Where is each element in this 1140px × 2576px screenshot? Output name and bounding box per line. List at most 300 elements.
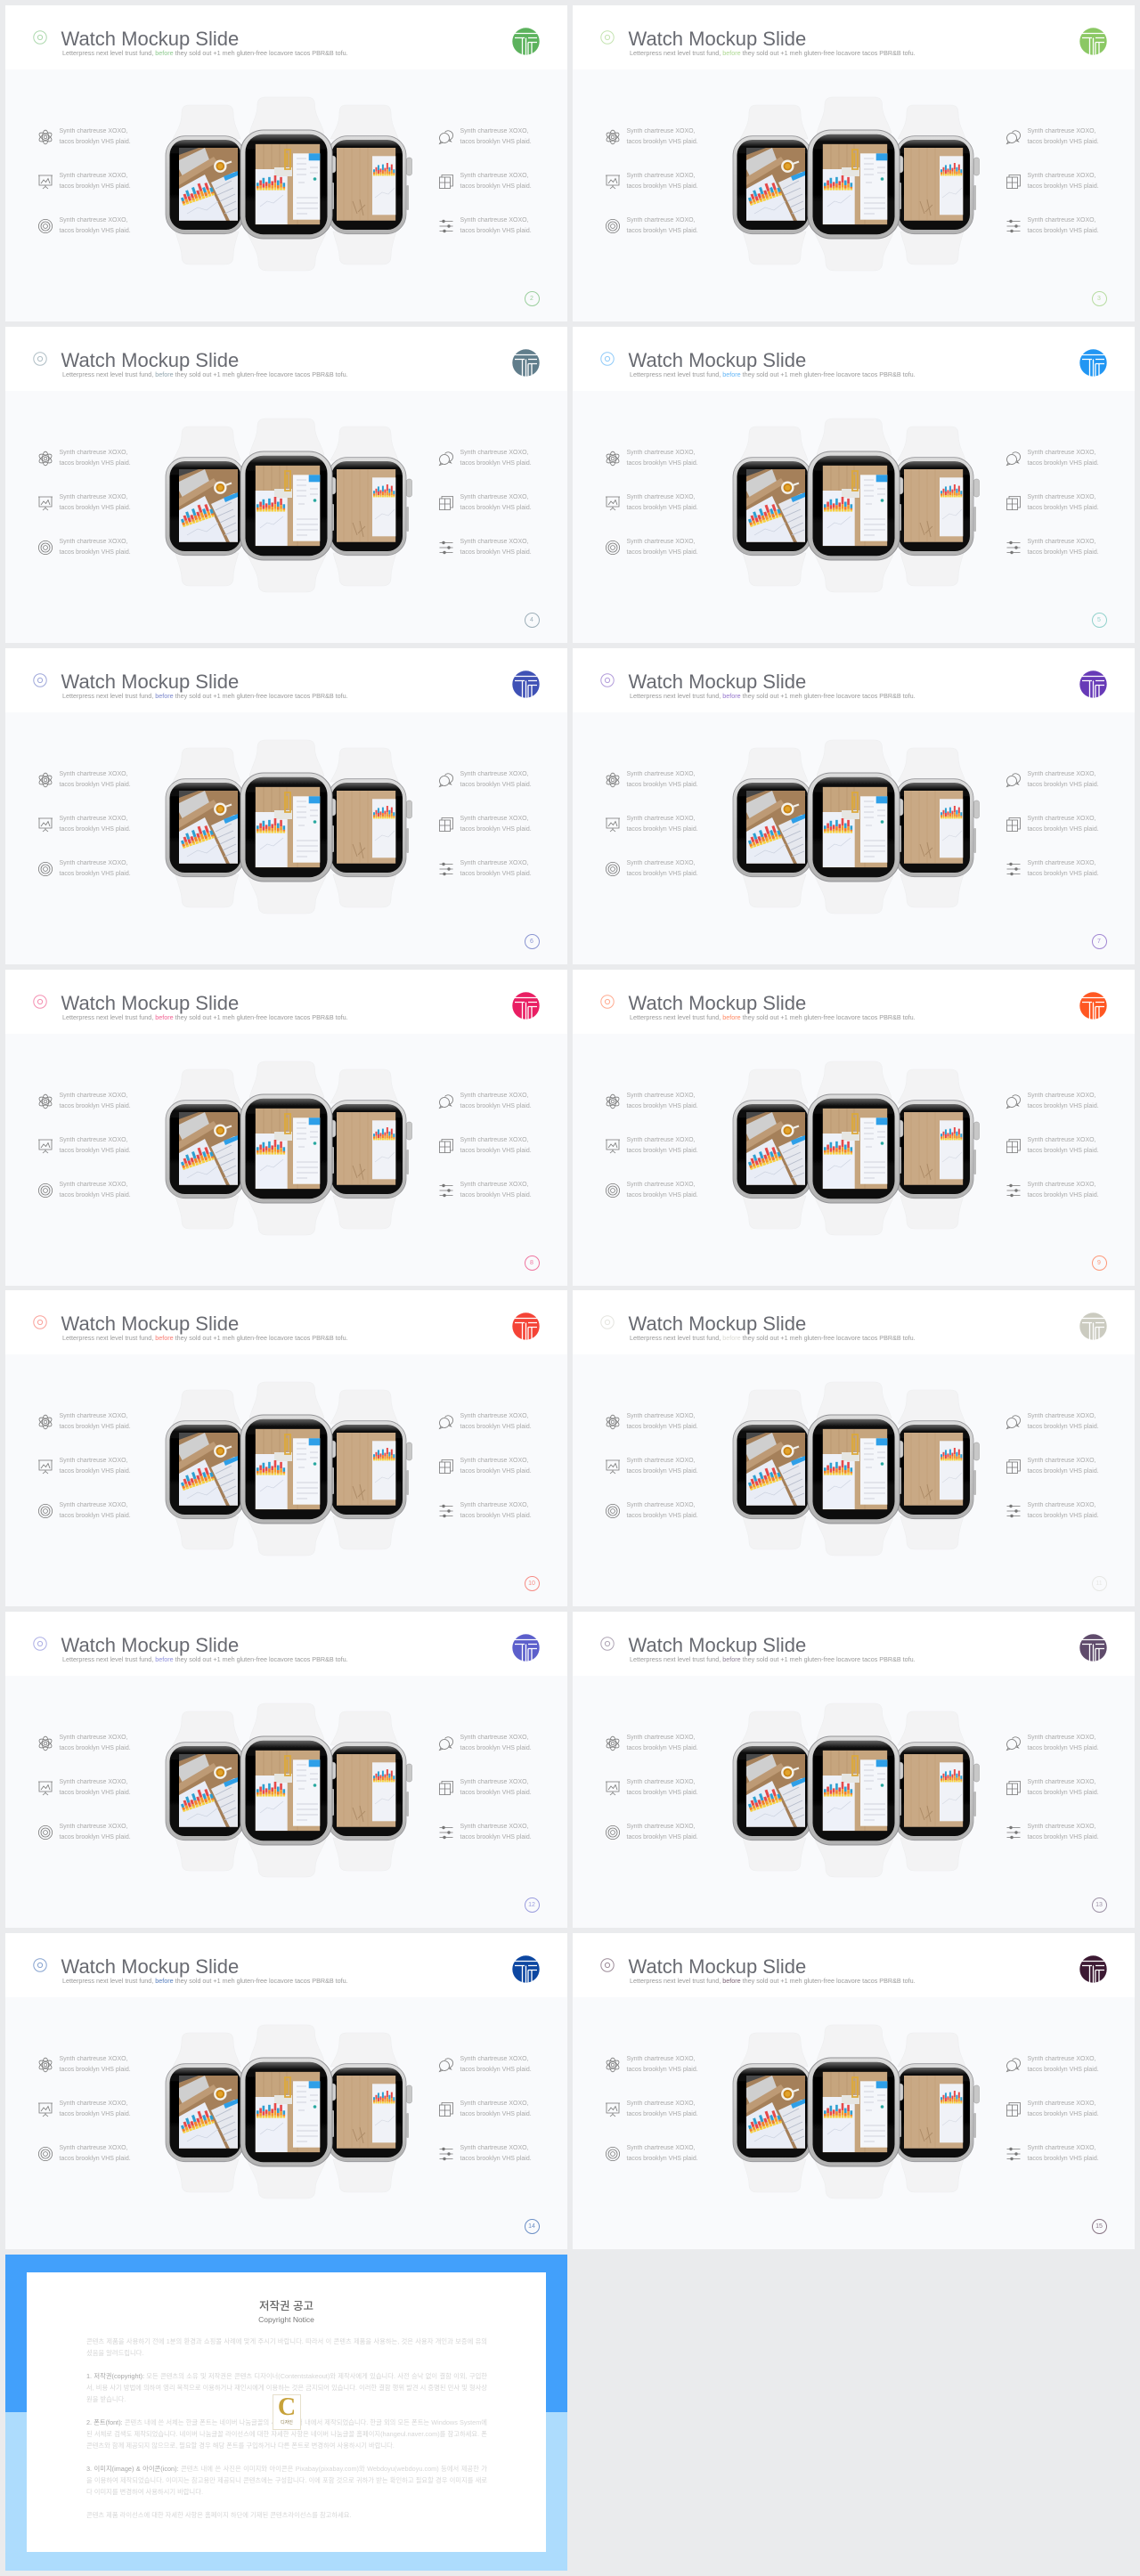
feature: layers — [1005, 1456, 1104, 1478]
feature: atom: tacos brooklyn VHS plaid. — [627, 1424, 698, 1430]
title: Watch Mockup Slide — [61, 992, 239, 1014]
feature: atom: tacos brooklyn VHS plaid. — [59, 1745, 131, 1751]
feature: sliders — [436, 858, 536, 881]
feature: presentation: Synth chartreuse XOXO, — [59, 494, 128, 500]
feature: presentation — [38, 494, 131, 511]
feature: layers: Synth chartreuse XOXO, — [1028, 816, 1096, 822]
feature: layers: Synth chartreuse XOXO, — [460, 1137, 529, 1143]
slide panel 14 — [5, 1933, 567, 2249]
icon: header ring — [33, 352, 47, 366]
subtitle: Letterpress next level trust fund, before they sold out +1 meh gluten-free locavore tacos PBR&B tofu. — [62, 1977, 348, 1985]
title: Watch Mockup Slide — [61, 1312, 239, 1335]
icon: brand logo — [512, 1312, 540, 1340]
page number — [524, 934, 540, 949]
feature: sliders: tacos brooklyn VHS plaid. — [1028, 2156, 1099, 2162]
feature: layers: Synth chartreuse XOXO, — [1028, 1137, 1096, 1143]
header band — [5, 1933, 567, 1997]
page number — [524, 2219, 540, 2234]
page number: 3 — [1097, 296, 1101, 302]
feature: presentation — [36, 814, 135, 836]
feature: target: Synth chartreuse XOXO, — [59, 860, 128, 866]
feature: sliders: Synth chartreuse XOXO, — [460, 539, 529, 545]
header band — [573, 1933, 1135, 1997]
feature: target — [36, 1822, 135, 1844]
watch trio mockup — [5, 1612, 567, 1928]
feature: atom — [606, 449, 698, 467]
feature: sliders: tacos brooklyn VHS plaid. — [1028, 549, 1099, 556]
feature: target — [604, 1180, 704, 1202]
feature: layers — [1005, 1777, 1104, 1800]
feature: sliders — [1006, 539, 1099, 556]
feature: atom: tacos brooklyn VHS plaid. — [59, 2067, 131, 2073]
feature: chat — [1005, 769, 1104, 791]
icon: brand logo — [1079, 349, 1107, 377]
feature: sliders: tacos brooklyn VHS plaid. — [1028, 871, 1099, 877]
feature: atom — [604, 2053, 704, 2076]
icon: brand logo — [1079, 1634, 1107, 1662]
feature: sliders: tacos brooklyn VHS plaid. — [460, 2156, 532, 2162]
feature: sliders: tacos brooklyn VHS plaid. — [1028, 1192, 1099, 1199]
subtitle: Letterpress next level trust fund, before they sold out +1 meh gluten-free locavore tacos PBR&B tofu. — [630, 370, 916, 378]
subtitle: Letterpress next level trust fund, before they sold out +1 meh gluten-free locavore tacos PBR&B tofu. — [630, 1334, 916, 1342]
feature: chat: tacos brooklyn VHS plaid. — [460, 2067, 532, 2073]
text block: font — [27, 2417, 546, 2451]
icon: header ring — [33, 995, 47, 1009]
feature: target — [604, 1500, 704, 1523]
feature: chat — [1005, 1410, 1104, 1434]
feature: atom: Synth chartreuse XOXO, — [627, 1412, 696, 1419]
feature: layers — [439, 494, 532, 511]
feature: layers: tacos brooklyn VHS plaid. — [1028, 1148, 1099, 1154]
page number: 14 — [528, 2223, 535, 2230]
feature: layers — [439, 173, 532, 190]
feature: target — [36, 2143, 135, 2166]
subtitle: Letterpress next level trust fund, before they sold out +1 meh gluten-free locavore tacos PBR&B tofu. — [62, 1013, 348, 1021]
feature: atom: Synth chartreuse XOXO, — [627, 2055, 696, 2062]
subtitle: Letterpress next level trust fund, before they sold out +1 meh gluten-free locavore tacos PBR&B tofu. — [630, 1977, 916, 1985]
icon: brand logo — [1079, 28, 1107, 55]
feature: target: tacos brooklyn VHS plaid. — [627, 549, 698, 556]
feature: sliders — [1005, 1822, 1104, 1844]
feature: presentation: Synth chartreuse XOXO, — [627, 494, 696, 500]
page number — [524, 613, 540, 628]
watch trio mockup — [166, 97, 412, 271]
feature: layers: tacos brooklyn VHS plaid. — [460, 2111, 532, 2117]
feature: atom: Synth chartreuse XOXO, — [59, 1412, 128, 1419]
feature: layers: tacos brooklyn VHS plaid. — [1028, 826, 1099, 833]
title: Watch Mockup Slide — [629, 1312, 806, 1335]
page number: 2 — [530, 296, 533, 302]
title: Watch Mockup Slide — [629, 1634, 806, 1656]
feature: presentation: Synth chartreuse XOXO, — [627, 2101, 696, 2107]
feature: sliders — [440, 217, 532, 234]
feature: presentation — [606, 494, 698, 511]
icon: header ring — [33, 673, 47, 687]
feature: sliders: Synth chartreuse XOXO, — [1028, 1502, 1096, 1508]
slide panel 8 — [5, 970, 567, 1286]
subtitle: Letterpress next level trust fund, before they sold out +1 meh gluten-free locavore tacos PBR&B tofu. — [62, 49, 348, 57]
feature: layers — [1006, 173, 1099, 190]
slide panel 7 — [573, 648, 1135, 964]
subtitle: Letterpress next level trust fund, before they sold out +1 meh gluten-free locavore tacos PBR&B tofu. — [62, 1334, 348, 1342]
feature: target: tacos brooklyn VHS plaid. — [627, 1192, 698, 1199]
feature: atom — [604, 769, 704, 791]
feature: sliders: Synth chartreuse XOXO, — [460, 1824, 529, 1830]
feature: target — [36, 1500, 135, 1523]
stamp logo — [273, 2394, 301, 2430]
feature: atom — [39, 449, 131, 467]
icon: header ring — [33, 1637, 47, 1651]
feature: atom: tacos brooklyn VHS plaid. — [627, 139, 698, 145]
subtitle: Letterpress next level trust fund, before they sold out +1 meh gluten-free locavore tacos PBR&B tofu. — [630, 1013, 916, 1021]
title: Watch Mockup Slide — [61, 1955, 239, 1978]
feature: atom: tacos brooklyn VHS plaid. — [627, 1745, 698, 1751]
page number: 10 — [528, 1581, 535, 1587]
page number — [524, 291, 540, 306]
feature: atom — [36, 2053, 135, 2076]
feature: presentation: Synth chartreuse XOXO, — [59, 173, 128, 179]
feature: chat — [1005, 2053, 1104, 2076]
feature: chat — [1006, 128, 1099, 145]
watch trio mockup — [5, 970, 567, 1286]
header band — [573, 1612, 1135, 1676]
feature: sliders: Synth chartreuse XOXO, — [460, 1182, 529, 1188]
feature: sliders: Synth chartreuse XOXO, — [460, 1502, 529, 1508]
heading: English subtitle: Copyright Notice — [258, 2315, 314, 2324]
slide panel 6 — [5, 648, 567, 964]
feature: sliders: Synth chartreuse XOXO, — [1028, 539, 1096, 545]
feature: sliders — [436, 2143, 536, 2166]
feature: presentation: Synth chartreuse XOXO, — [627, 1137, 696, 1143]
feature: presentation: tacos brooklyn VHS plaid. — [59, 826, 131, 833]
feature: presentation — [604, 2099, 704, 2121]
feature: layers — [436, 1777, 536, 1800]
slide panel 5 — [573, 327, 1135, 643]
feature: sliders — [1006, 217, 1099, 234]
feature: target: tacos brooklyn VHS plaid. — [627, 871, 698, 877]
watch trio mockup — [573, 1612, 1135, 1928]
feature: chat: Synth chartreuse XOXO, — [460, 1735, 529, 1740]
feature: chat — [438, 128, 532, 145]
feature: chat: Synth chartreuse XOXO, — [1028, 1412, 1096, 1419]
feature: atom: Synth chartreuse XOXO, — [627, 771, 696, 776]
feature: layers — [1005, 814, 1104, 836]
feature: sliders: tacos brooklyn VHS plaid. — [1028, 1513, 1099, 1519]
feature: target: Synth chartreuse XOXO, — [59, 539, 128, 545]
feature: target — [606, 539, 698, 556]
feature: atom: tacos brooklyn VHS plaid. — [59, 1103, 131, 1109]
feature: layers: Synth chartreuse XOXO, — [460, 173, 529, 179]
watch trio mockup — [573, 1290, 1135, 1606]
feature: target: Synth chartreuse XOXO, — [59, 1502, 128, 1508]
feature: chat — [436, 769, 536, 791]
feature: chat: tacos brooklyn VHS plaid. — [1028, 1103, 1099, 1109]
icon: brand logo — [1079, 1312, 1107, 1340]
feature: chat: tacos brooklyn VHS plaid. — [460, 1745, 532, 1751]
icon: brand logo — [1079, 670, 1107, 698]
feature: sliders — [1005, 1180, 1104, 1202]
page number — [1092, 2219, 1106, 2234]
feature: target: tacos brooklyn VHS plaid. — [627, 2156, 698, 2162]
feature: sliders: Synth chartreuse XOXO, — [1028, 217, 1096, 223]
slide panel 3 — [573, 5, 1135, 321]
feature: target: Synth chartreuse XOXO, — [627, 860, 696, 866]
feature: atom: Synth chartreuse XOXO, — [59, 128, 128, 134]
feature: target: tacos brooklyn VHS plaid. — [59, 549, 131, 556]
feature: sliders: tacos brooklyn VHS plaid. — [1028, 228, 1099, 234]
feature: target: tacos brooklyn VHS plaid. — [59, 2156, 131, 2162]
text block: image and icon: 다 이미지를 변경하여 사용하시기 바랍니다. — [86, 2488, 203, 2496]
feature: target: tacos brooklyn VHS plaid. — [59, 1513, 131, 1519]
feature: target: Synth chartreuse XOXO, — [627, 1502, 696, 1508]
page number: 5 — [1097, 617, 1101, 623]
feature: presentation: Synth chartreuse XOXO, — [59, 1137, 128, 1143]
page number: 8 — [530, 1260, 533, 1266]
icon: brand logo — [512, 670, 540, 698]
icon: brand logo — [512, 992, 540, 1020]
text block: copyright: 1. 저작권(copyright): 모든 콘텐츠의 소유 및 저작권은 콘텐츠 디자이너(Contentstakeout)와 제작사에게 있습니다. 사전 승낙 없이 결함 이외, 구입한 — [86, 2372, 487, 2380]
feature: sliders: Synth chartreuse XOXO, — [1028, 1182, 1096, 1188]
feature: target: tacos brooklyn VHS plaid. — [59, 1192, 131, 1199]
feature: layers — [436, 814, 536, 836]
header band — [573, 970, 1135, 1034]
feature: layers: tacos brooklyn VHS plaid. — [1028, 505, 1099, 511]
watch trio mockup — [5, 1290, 567, 1606]
title: Watch Mockup Slide — [629, 992, 806, 1014]
feature: presentation: tacos brooklyn VHS plaid. — [627, 1790, 698, 1796]
subtitle: Letterpress next level trust fund, before they sold out +1 meh gluten-free locavore tacos PBR&B tofu. — [630, 692, 916, 700]
feature: chat: Synth chartreuse XOXO, — [1028, 449, 1096, 456]
feature: layers: tacos brooklyn VHS plaid. — [460, 1148, 532, 1154]
header band — [5, 1612, 567, 1676]
feature: sliders: Synth chartreuse XOXO, — [460, 217, 529, 223]
page number: 13 — [1095, 1902, 1103, 1908]
feature: layers — [1006, 494, 1099, 511]
feature: sliders: tacos brooklyn VHS plaid. — [460, 228, 532, 234]
feature: presentation: tacos brooklyn VHS plaid. — [627, 183, 698, 190]
feature: layers: tacos brooklyn VHS plaid. — [460, 183, 532, 190]
feature: chat: Synth chartreuse XOXO, — [460, 771, 529, 776]
feature: chat — [1005, 1090, 1104, 1113]
feature: layers: tacos brooklyn VHS plaid. — [1028, 1790, 1099, 1796]
feature: chat: tacos brooklyn VHS plaid. — [1028, 460, 1099, 467]
feature: target: tacos brooklyn VHS plaid. — [627, 1834, 698, 1841]
feature: presentation: tacos brooklyn VHS plaid. — [627, 1468, 698, 1475]
title: Watch Mockup Slide — [61, 349, 239, 371]
watch trio mockup — [732, 418, 980, 592]
text block: image and icon — [27, 2463, 546, 2498]
icon: header ring — [600, 1958, 615, 1972]
title: Watch Mockup Slide — [629, 670, 806, 693]
subtitle: Letterpress next level trust fund, before they sold out +1 meh gluten-free locavore tacos PBR&B tofu. — [62, 370, 348, 378]
feature: presentation: tacos brooklyn VHS plaid. — [627, 505, 698, 511]
feature: presentation: Synth chartreuse XOXO, — [627, 816, 696, 822]
feature: target — [604, 858, 704, 881]
feature: target: tacos brooklyn VHS plaid. — [59, 228, 131, 234]
feature: chat: Synth chartreuse XOXO, — [1028, 2055, 1096, 2062]
feature: chat: Synth chartreuse XOXO, — [460, 1092, 529, 1099]
feature: atom — [36, 1090, 135, 1113]
icon: header ring — [33, 1315, 47, 1329]
feature: atom: tacos brooklyn VHS plaid. — [59, 139, 131, 145]
feature: target — [604, 2143, 704, 2166]
feature: chat: Synth chartreuse XOXO, — [460, 128, 529, 134]
feature: presentation — [604, 814, 704, 836]
icon: header ring — [600, 352, 615, 366]
feature: chat: tacos brooklyn VHS plaid. — [460, 1424, 532, 1430]
header band — [5, 1290, 567, 1354]
feature: layers — [436, 1456, 536, 1478]
icon: brand logo — [512, 1955, 540, 1983]
feature: atom: Synth chartreuse XOXO, — [627, 1735, 696, 1740]
feature: atom: tacos brooklyn VHS plaid. — [59, 460, 131, 467]
slide panel 4 — [5, 327, 567, 643]
feature: chat — [438, 449, 532, 467]
subtitle: Letterpress next level trust fund, before they sold out +1 meh gluten-free locavore tacos PBR&B tofu. — [62, 1655, 348, 1663]
feature: target — [38, 539, 131, 556]
icon: header ring — [600, 1315, 615, 1329]
feature: sliders — [436, 1822, 536, 1844]
feature: target: tacos brooklyn VHS plaid. — [627, 228, 698, 234]
feature: target: Synth chartreuse XOXO, — [627, 539, 696, 545]
subtitle: Letterpress next level trust fund, before they sold out +1 meh gluten-free locavore tacos PBR&B tofu. — [62, 692, 348, 700]
page number — [1092, 1255, 1106, 1271]
icon: brand logo — [1079, 992, 1107, 1020]
feature: layers: Synth chartreuse XOXO, — [460, 1779, 529, 1785]
feature: presentation: tacos brooklyn VHS plaid. — [627, 826, 698, 833]
title: Watch Mockup Slide — [61, 1634, 239, 1656]
feature: layers: Synth chartreuse XOXO, — [1028, 1458, 1096, 1464]
feature: sliders — [1005, 858, 1104, 881]
feature: sliders: tacos brooklyn VHS plaid. — [460, 1192, 532, 1199]
feature: presentation — [604, 1456, 704, 1478]
feature: chat — [1005, 1733, 1104, 1754]
white notice card — [27, 2272, 546, 2552]
feature: presentation: tacos brooklyn VHS plaid. — [627, 2111, 698, 2117]
feature: chat: Synth chartreuse XOXO, — [460, 2055, 529, 2062]
feature: layers — [436, 1135, 536, 1158]
watch trio mockup — [573, 648, 1135, 964]
watch trio mockup — [5, 648, 567, 964]
feature: sliders — [436, 1180, 536, 1202]
icon: brand logo — [512, 28, 540, 55]
feature: target — [604, 1822, 704, 1844]
feature: atom: tacos brooklyn VHS plaid. — [59, 782, 131, 788]
feature: layers: tacos brooklyn VHS plaid. — [1028, 2111, 1099, 2117]
watch trio mockup — [166, 418, 412, 592]
page number: 9 — [1097, 1260, 1101, 1266]
feature: target: tacos brooklyn VHS plaid. — [59, 1834, 131, 1841]
feature: atom: Synth chartreuse XOXO, — [59, 1735, 128, 1740]
feature: sliders: tacos brooklyn VHS plaid. — [460, 1834, 532, 1841]
feature: atom — [606, 128, 698, 145]
feature: layers: Synth chartreuse XOXO, — [460, 494, 529, 500]
feature: presentation: tacos brooklyn VHS plaid. — [627, 1148, 698, 1154]
icon: brand logo — [512, 349, 540, 377]
feature: atom: Synth chartreuse XOXO, — [59, 1092, 128, 1099]
feature: presentation — [606, 173, 698, 190]
feature: chat: tacos brooklyn VHS plaid. — [460, 460, 532, 467]
page number — [1092, 934, 1106, 949]
icon: header ring — [600, 673, 615, 687]
icon: brand logo — [1079, 1955, 1107, 1983]
page number: 12 — [528, 1902, 535, 1908]
page number: 11 — [1095, 1581, 1103, 1587]
feature: layers — [1005, 1135, 1104, 1158]
feature: target: Synth chartreuse XOXO, — [59, 1824, 128, 1830]
feature: target — [36, 1180, 135, 1202]
feature: sliders — [436, 1500, 536, 1523]
feature: presentation — [604, 1135, 704, 1158]
feature: sliders: tacos brooklyn VHS plaid. — [460, 1513, 532, 1519]
feature: presentation: tacos brooklyn VHS plaid. — [59, 1468, 131, 1475]
page number: 15 — [1095, 2223, 1103, 2230]
feature: chat — [1006, 449, 1099, 467]
feature: target: tacos brooklyn VHS plaid. — [627, 1513, 698, 1519]
feature: chat: tacos brooklyn VHS plaid. — [460, 139, 532, 145]
feature: sliders: tacos brooklyn VHS plaid. — [460, 549, 532, 556]
icon: brand logo — [512, 1634, 540, 1662]
feature: layers: Synth chartreuse XOXO, — [1028, 173, 1096, 179]
feature: layers: tacos brooklyn VHS plaid. — [460, 1790, 532, 1796]
feature: sliders: tacos brooklyn VHS plaid. — [460, 871, 532, 877]
title: Watch Mockup Slide — [629, 1955, 806, 1978]
feature: layers — [1005, 2099, 1104, 2121]
feature: layers: Synth chartreuse XOXO, — [1028, 1779, 1096, 1785]
feature: layers: Synth chartreuse XOXO, — [460, 816, 529, 822]
page number — [1092, 1897, 1106, 1913]
feature: presentation — [36, 2099, 135, 2121]
feature: presentation: tacos brooklyn VHS plaid. — [59, 183, 131, 190]
text block: copyright: 원을 받습니다. — [86, 2395, 126, 2403]
feature: sliders: Synth chartreuse XOXO, — [1028, 860, 1096, 866]
feature: chat: tacos brooklyn VHS plaid. — [1028, 139, 1099, 145]
subtitle: Letterpress next level trust fund, before they sold out +1 meh gluten-free locavore tacos PBR&B tofu. — [630, 49, 916, 57]
icon: header ring — [600, 30, 615, 45]
feature: target: Synth chartreuse XOXO, — [59, 2145, 128, 2151]
text block: closing: 콘텐츠 제품 라이선스에 대한 자세한 사항은 홈페이지 하단에 기재된 콘텐츠라이선스를 참고하세요. — [86, 2511, 352, 2519]
slide panel 9 — [573, 970, 1135, 1286]
feature: presentation: Synth chartreuse XOXO, — [59, 2101, 128, 2107]
feature: sliders: Synth chartreuse XOXO, — [460, 2145, 529, 2151]
title: Watch Mockup Slide — [629, 28, 806, 50]
watch trio mockup — [732, 97, 980, 271]
feature: target: Synth chartreuse XOXO, — [627, 1824, 696, 1830]
icon: header ring — [33, 30, 47, 45]
heading: Korean title: 저작권 공고 — [259, 2300, 314, 2312]
feature: chat: Synth chartreuse XOXO, — [1028, 1735, 1096, 1740]
feature: atom: tacos brooklyn VHS plaid. — [627, 782, 698, 788]
feature: target: tacos brooklyn VHS plaid. — [59, 871, 131, 877]
feature: atom — [604, 1733, 704, 1754]
header band — [5, 5, 567, 69]
slide panel 13 — [573, 1612, 1135, 1928]
feature: target: Synth chartreuse XOXO, — [627, 2145, 696, 2151]
feature: atom — [36, 1410, 135, 1434]
page number — [524, 1576, 540, 1591]
header band — [5, 970, 567, 1034]
header band — [5, 327, 567, 391]
panel: copyright notice — [5, 2255, 567, 2571]
page number — [524, 1255, 540, 1271]
feature: chat: tacos brooklyn VHS plaid. — [1028, 2067, 1099, 2073]
feature: sliders — [440, 539, 532, 556]
feature: atom — [604, 1090, 704, 1113]
feature: target — [36, 858, 135, 881]
feature: layers: Synth chartreuse XOXO, — [460, 2101, 529, 2107]
feature: chat: Synth chartreuse XOXO, — [1028, 1092, 1096, 1099]
feature: chat — [436, 2053, 536, 2076]
